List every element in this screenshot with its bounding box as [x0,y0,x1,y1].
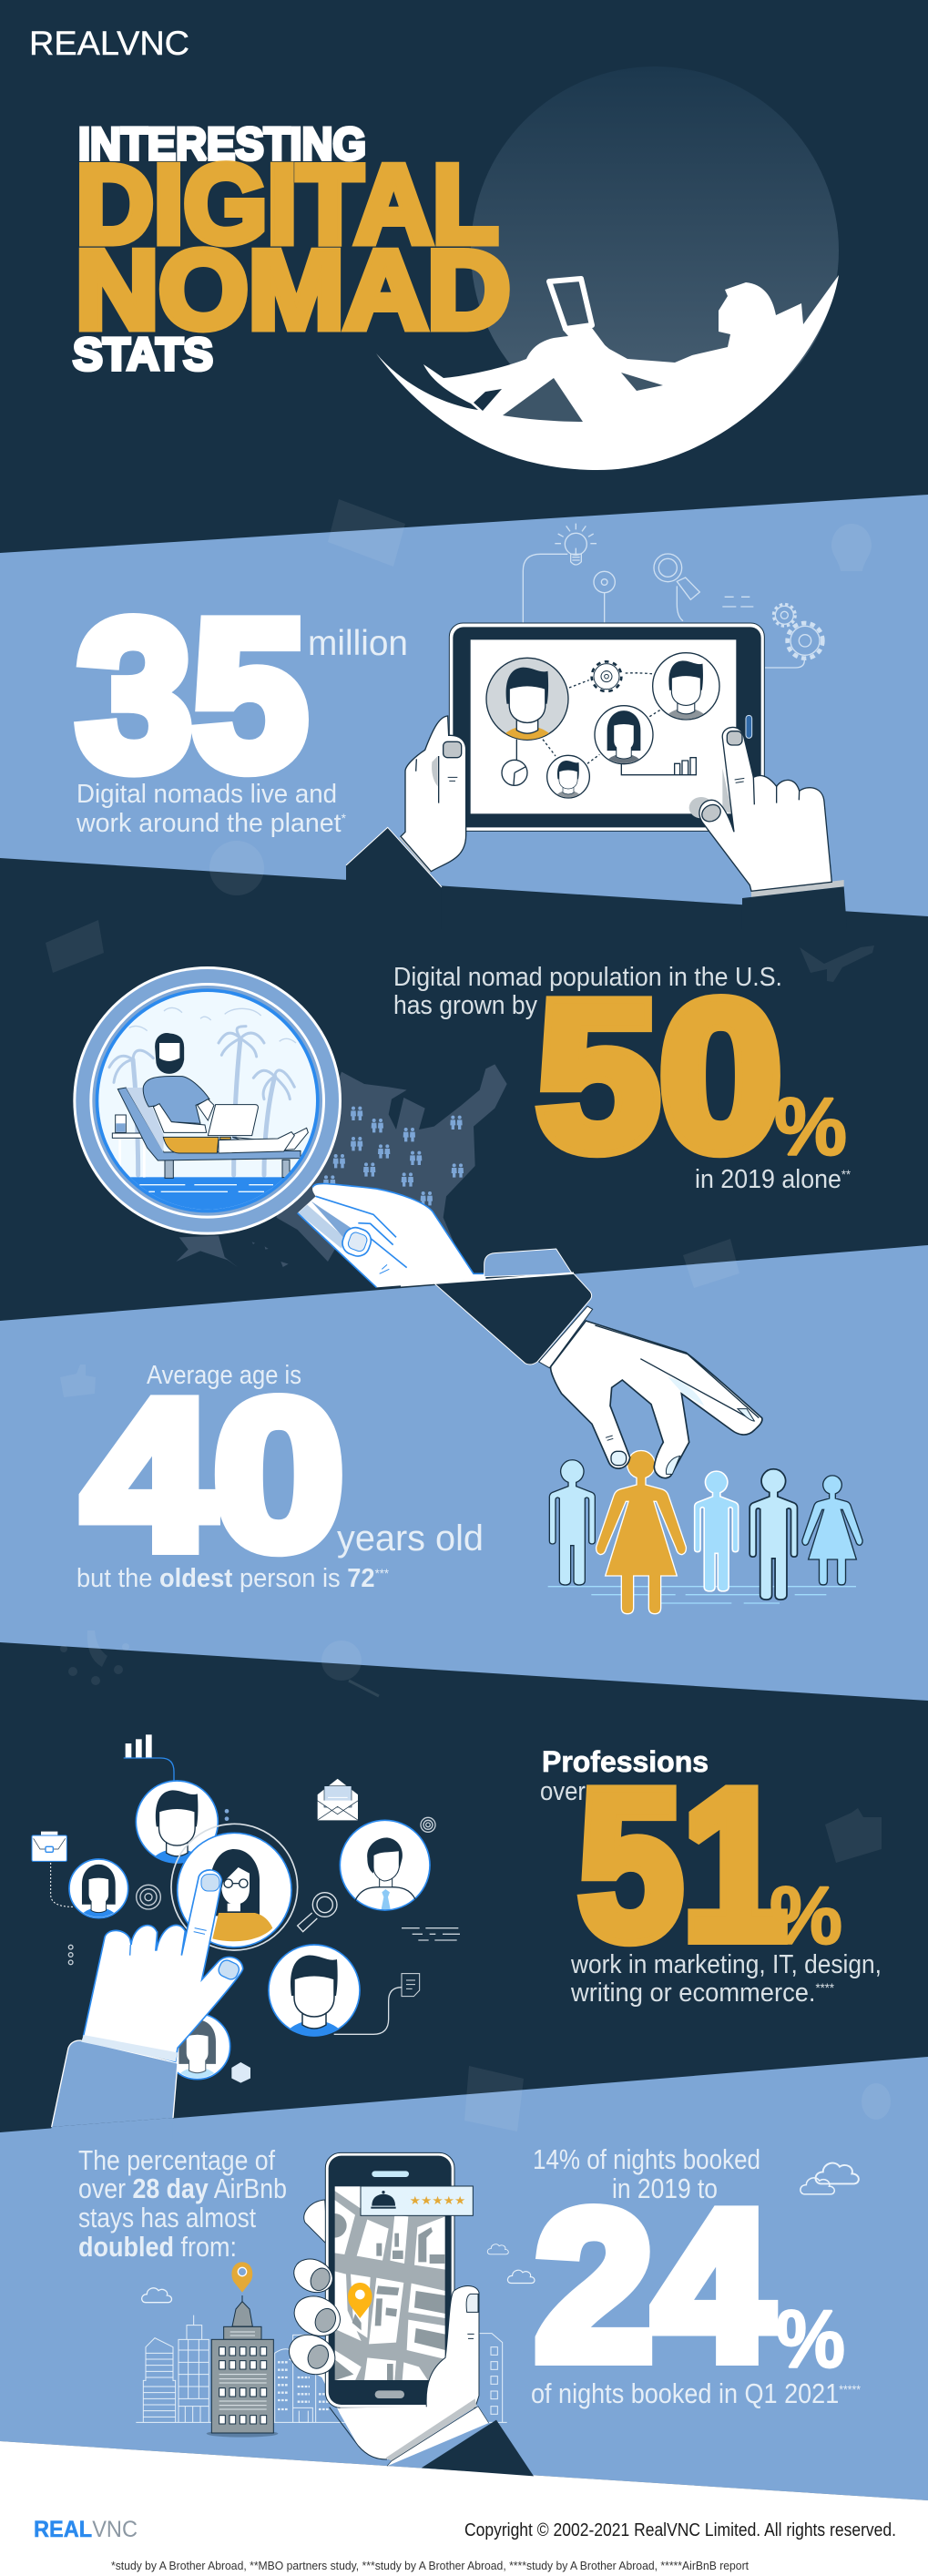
sleeve [422,2420,534,2476]
people markers on map [323,1107,464,1205]
right sleeve [742,886,847,929]
person: man centre [695,1471,739,1591]
stat: 24 percent: % [776,2295,845,2386]
avatar: man bottom right [269,1945,360,2077]
illustration: touching profile network [32,1734,460,2141]
stat: 24 percent: 24 [535,2168,772,2404]
water [129,1177,284,1210]
stat: 35 million: * [342,811,347,825]
logo: RealVNC header: REALVNC [29,25,189,62]
avatar: right man [653,653,719,749]
right hand [689,727,844,897]
stat: 50 percent: in 2019 alone [695,1165,853,1194]
stat: 35 million: 35 [76,578,308,813]
lounger [117,1088,301,1178]
stat: professions 51 percent: 51 [579,1747,787,1983]
avatar: woman left [69,1859,128,1943]
rating card: ★★★★★ [410,2193,465,2207]
stat: 35 million: Digital nomads live and [76,780,337,809]
tablet body [449,623,764,831]
map of the US [176,1064,507,1269]
stat: average age 40: Average age is [147,1361,301,1390]
stat: 24 percent: 14% of nights booked [533,2143,760,2175]
clouds right of phone [487,2244,535,2283]
stat: professions 51 percent: Professions [542,1745,709,1778]
avatar: small man [547,755,589,816]
lens rings [73,966,342,1235]
avatar: partly hidden [165,2014,230,2107]
avatar: man top [136,1781,218,1899]
band: white footer [0,2441,928,2576]
stat: 24 percent: in 2019 to [612,2172,718,2204]
illustration: hand picking a person from a group [401,1249,862,1614]
footnote sources: *study by A Brother Abroad, **MBO partners study, ***study by A Brother Abroad, ****study by A Brother Abroad, *****AirBnB report [111,2559,749,2572]
left hand [399,716,466,873]
bar chart icon [621,758,697,775]
person: selected woman [597,1451,686,1614]
stat: average age 40: but the oldest person is 72 [76,1564,377,1593]
document icon [334,1974,420,2034]
stat: 50 percent: % [774,1082,847,1173]
hand fingers and thumb in front of phone [282,2253,479,2459]
cuff [385,2398,476,2461]
person: man tall [750,1469,797,1600]
band: blue section average age [0,1245,928,1701]
icons above tablet [523,524,822,668]
stat: 50 percent: has grown by [393,991,537,1020]
title: INTERESTING [78,118,366,169]
stat: airbnb text left: doubled from: [78,2231,237,2263]
phone [322,2152,454,2407]
map pin on building [231,2262,252,2293]
avatar: large man [486,658,568,777]
illustration: tablet held in two hands [346,524,847,929]
briefcase icon [32,1832,73,1906]
city skyline [136,2315,507,2422]
cube icon [231,2062,250,2083]
envelope icon [317,1778,358,1820]
pie chart icon [502,740,527,785]
stat: 24 percent [531,2143,861,2409]
illustration: smartphone map with city [136,2152,535,2476]
stat: professions 51 percent: % [770,1871,842,1962]
stat: 50 percent: Digital nomad population in the U.S. [393,963,782,992]
title: STATS [73,329,213,380]
stat: professions 51 percent [540,1745,882,2008]
main building [207,2295,278,2438]
title [73,118,510,380]
logo: RealVNC footer: REALVNC [34,2517,138,2542]
stat: 35 million: work around the planet [76,809,345,838]
band: blue section 35 million [0,495,928,916]
stat: average age 40: years old [337,1518,484,1559]
stat: airbnb text left: over 28 day AirBnb [78,2172,287,2204]
text dashes [402,1928,460,1940]
side table and glass [111,1115,146,1178]
lens scene: man on sun lounger [107,1007,309,1210]
avatar: man with tie [340,1820,430,1910]
stat: average age 40: *** [375,1566,390,1580]
palm trees [109,1027,294,1175]
stat: professions 51 percent: **** [815,1980,835,1995]
stat: 50 percent [393,958,852,1194]
avatar: woman [595,706,653,790]
cloud: left [142,2288,172,2303]
stat: average age 40: 40 [84,1357,344,1593]
pointing hand [81,1870,243,2061]
person: man left [549,1460,595,1585]
stat: airbnb text left [78,2144,287,2263]
magnifier handle and hand [298,1183,485,1287]
stat: 50 percent: ** [841,1167,852,1181]
stat: professions 51 percent: over [540,1777,586,1806]
clouds top right [801,2163,859,2194]
stat: average age 40 [76,1357,484,1593]
map screen [335,2186,445,2380]
picking hand [539,1306,762,1478]
man [143,1034,308,1153]
stat: airbnb text left: stays has almost [78,2202,256,2234]
cuff tab and sleeve [401,1249,592,1365]
hand behind phone [289,2200,479,2459]
stat: 24 percent: of nights booked in Q1 2021 [531,2377,884,2409]
faint background icons [46,499,891,2131]
gear icon [592,661,621,691]
stat: 35 million [76,578,408,838]
illustration: person on crescent moon [376,66,839,470]
ground lines [548,1587,856,1603]
target and dots icons [68,1817,435,1965]
stat: 24 percent: ***** [839,2382,861,2397]
person: woman small [802,1476,862,1585]
stat: airbnb text left: The percentage of [78,2144,275,2176]
band: blue section airbnb [0,2057,928,2500]
title: DIGITAL [76,142,498,266]
title: NOMAD [76,229,510,353]
stat: professions 51 percent: work in marketing, IT, design, [570,1950,882,1979]
network connectors [543,673,662,763]
left sleeve [346,827,442,929]
illustration: magnifying glass over US map [73,966,507,1287]
magnifier icon [298,1893,337,1932]
sleeve [48,2040,178,2141]
rating card [361,2186,473,2215]
screen map pin [348,2283,372,2318]
bar chart icon [124,1734,174,1781]
avatar: woman with glasses [171,1824,298,1950]
stat: 35 million: million [308,624,408,663]
stat: 50 percent: 50 [537,958,781,1194]
stat: professions 51 percent: writing or ecommerce. [571,1978,831,2008]
